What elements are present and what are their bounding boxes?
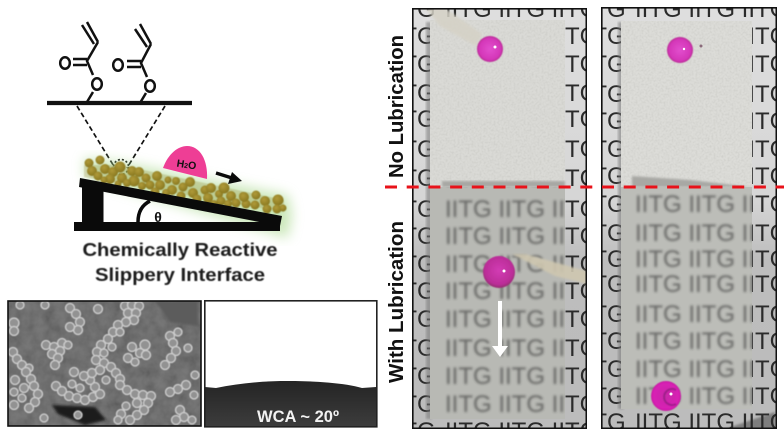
ramp and stand [74,178,282,231]
water contact angle panel [205,301,377,427]
glass slide: dry upper half [426,20,565,419]
water droplet [163,146,207,179]
rotated label: with lubrication: With Lubrication [386,221,408,383]
schematic caption: Chemically Reactive [82,239,278,260]
glass slide: lubricated lower half [621,187,752,409]
droplet: top [477,36,503,62]
zoom dashed guide lines [77,106,165,174]
water droplet: H2O [176,158,197,173]
droplet: bottom [651,381,681,411]
rotated label: no lubrication: No Lubrication [386,35,408,178]
schematic caption [82,239,278,285]
pipette tip: lower [512,254,590,284]
pipette tip [426,10,480,45]
green lubricant glow [84,158,292,238]
droplet: top [667,37,702,63]
red divider between no lubrication and with lubrication [385,186,784,188]
slide direction arrow [216,172,242,184]
glass slide: lubricated lower half [430,187,565,419]
schematic caption: Slippery Interface [95,264,265,285]
WCA label: WCA ~ 20º [257,408,339,426]
photo panel: after sliding [601,7,777,429]
white slide arrow [492,301,508,357]
SEM micrograph panel [8,300,201,426]
photo panel: before sliding [412,8,587,429]
chemical structure: acrylate groups on surface [47,22,192,103]
angle label theta: θ [154,209,162,225]
droplet: lower [483,256,515,288]
particle coating on ramp [84,156,286,214]
glass slide: dry upper half [618,21,752,409]
